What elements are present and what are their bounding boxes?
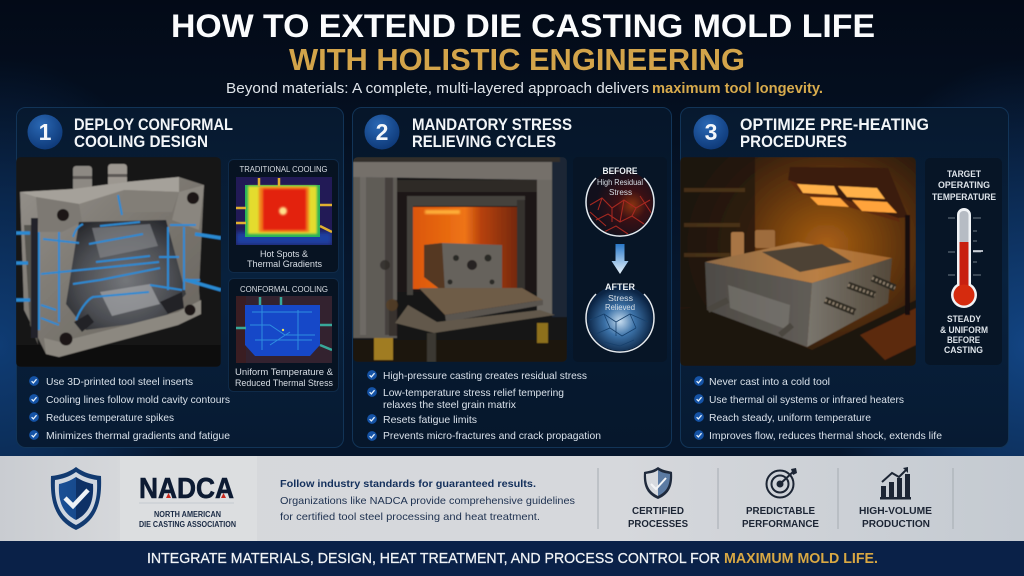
photo: mold under infrared heater	[680, 157, 916, 366]
number badge 1	[28, 114, 62, 150]
subtitle: Beyond materials: A complete, multi-layered approach delivers	[226, 81, 649, 97]
checklist: stress relieving: Low-temperature stress relief tempering	[383, 387, 564, 399]
target label: OPERATING	[938, 180, 990, 190]
card: traditional cooling thermal map: Thermal Gradients	[247, 259, 322, 270]
heading: mandatory stress relieving cycles: RELIEVING CYCLES	[412, 133, 556, 151]
title: WITH HOLISTIC ENGINEERING	[289, 42, 745, 77]
heading: deploy conformal cooling design: DEPLOY CONFORMAL	[74, 116, 233, 134]
before circle: Stress	[609, 188, 632, 197]
photo: cutaway mold with blue cooling lines	[16, 157, 221, 367]
checklist: stress relieving: High-pressure casting creates residual stress	[383, 370, 587, 382]
logo: NADCA: DIE CASTING ASSOCIATION	[139, 520, 236, 529]
target label: TEMPERATURE	[932, 192, 996, 202]
steady label: BEFORE	[947, 335, 980, 345]
checklist: conformal cooling	[29, 376, 230, 442]
card: conformal cooling thermal map	[228, 278, 338, 392]
checklist: pre-heating: Use thermal oil systems or infrared heaters	[709, 394, 904, 406]
heading: deploy conformal cooling design	[74, 116, 233, 151]
subtitle	[226, 81, 823, 97]
title: HOW TO EXTEND DIE CASTING MOLD LIFE	[171, 8, 875, 44]
after circle: Stress	[608, 294, 633, 303]
card: traditional cooling thermal map	[228, 160, 338, 272]
icon: blue shield with check	[51, 467, 101, 530]
feature: predictable performance: PERFORMANCE	[742, 518, 819, 530]
card: traditional cooling thermal map: TRADITIONAL COOLING	[240, 164, 328, 174]
feature: certified processes: PROCESSES	[628, 518, 688, 530]
number badge 2	[364, 114, 400, 150]
number badge 3	[694, 114, 728, 150]
card: traditional cooling thermal map: Hot Spots &	[260, 249, 309, 260]
target label: TARGET	[947, 169, 982, 179]
subtitle: maximum tool longevity.	[652, 81, 823, 97]
card: before and after stress diagram	[573, 157, 667, 362]
checklist: stress relieving: Prevents micro-fractures and crack propagation	[383, 430, 601, 442]
heading: optimize pre-heating procedures	[740, 116, 929, 151]
after circle: Relieved	[605, 303, 635, 312]
checklist: pre-heating	[694, 376, 942, 442]
checklist: stress relieving	[367, 370, 601, 442]
photo: furnace with glowing chamber	[353, 157, 567, 362]
footer banner: MAXIMUM MOLD LIFE.	[724, 551, 878, 567]
logo: NADCA: NADCA	[139, 473, 234, 505]
standards text: for certified tool steel processing and heat treatment.	[280, 511, 540, 523]
checklist: conformal cooling: Cooling lines follow mold cavity contours	[46, 394, 230, 406]
card: conformal cooling thermal map: Reduced Thermal Stress	[235, 378, 333, 389]
target label	[932, 169, 996, 202]
checklist: pre-heating: Never cast into a cold tool	[709, 376, 830, 388]
panel: pre-heating	[680, 108, 1008, 448]
standards text: Follow industry standards for guaranteed results.	[280, 478, 536, 490]
checklist: stress relieving: relaxes the steel grain matrix	[383, 399, 517, 411]
checklist: conformal cooling: Use 3D-printed tool steel inserts	[46, 376, 193, 388]
icon: thermometer	[948, 208, 983, 308]
standards text: Organizations like NADCA provide comprehensive guidelines	[280, 495, 575, 507]
number badge 2: 2	[376, 119, 388, 145]
panel: conformal cooling	[16, 108, 344, 448]
logo: NADCA: NORTH AMERICAN	[154, 510, 221, 519]
heading: mandatory stress relieving cycles	[412, 116, 572, 151]
before circle: High Residual	[597, 178, 643, 187]
arrow: before to after	[612, 244, 628, 274]
feature: high-volume production	[859, 467, 932, 530]
feature: predictable performance	[742, 468, 819, 530]
checklist: pre-heating: Reach steady, uniform temperature	[709, 412, 871, 424]
checklist: conformal cooling: Minimizes thermal gradients and fatigue	[46, 430, 230, 442]
steady label: & UNIFORM	[940, 325, 988, 335]
panel: stress relieving	[352, 108, 672, 448]
heading: deploy conformal cooling design: COOLING DESIGN	[74, 133, 208, 151]
steady label: CASTING	[944, 345, 983, 355]
heading: optimize pre-heating procedures: OPTIMIZE PRE-HEATING	[740, 116, 929, 134]
before circle: BEFORE	[602, 166, 638, 177]
feature: certified processes: CERTIFIED	[632, 505, 684, 517]
steady label	[940, 314, 988, 355]
standards text	[280, 478, 575, 523]
feature: high-volume production: HIGH-VOLUME	[859, 505, 932, 517]
card: target temperature thermometer	[925, 158, 1002, 365]
checklist: pre-heating: Improves flow, reduces thermal shock, extends life	[709, 430, 942, 442]
feature: predictable performance: PREDICTABLE	[746, 505, 815, 517]
footer banner: INTEGRATE MATERIALS, DESIGN, HEAT TREATMENT, AND PROCESS CONTROL FOR	[147, 551, 720, 567]
checklist: conformal cooling: Reduces temperature spikes	[46, 412, 174, 424]
after circle: AFTER	[605, 282, 635, 293]
after circle	[586, 282, 654, 352]
before circle	[586, 166, 654, 236]
number badge 3: 3	[705, 119, 717, 145]
logo: NADCA	[139, 473, 236, 529]
heading: optimize pre-heating procedures: PROCEDURES	[740, 133, 847, 151]
feature: high-volume production: PRODUCTION	[862, 518, 930, 530]
checklist: stress relieving: Resets fatigue limits	[383, 414, 477, 426]
feature: certified processes	[628, 467, 688, 530]
card: conformal cooling thermal map: CONFORMAL COOLING	[240, 284, 328, 294]
number badge 1: 1	[39, 119, 52, 145]
heading: mandatory stress relieving cycles: MANDATORY STRESS	[412, 116, 572, 134]
title	[171, 8, 875, 77]
steady label: STEADY	[947, 314, 981, 324]
card: conformal cooling thermal map: Uniform Temperature &	[235, 367, 334, 378]
footer banner	[0, 541, 1024, 576]
standards band	[0, 456, 1024, 541]
